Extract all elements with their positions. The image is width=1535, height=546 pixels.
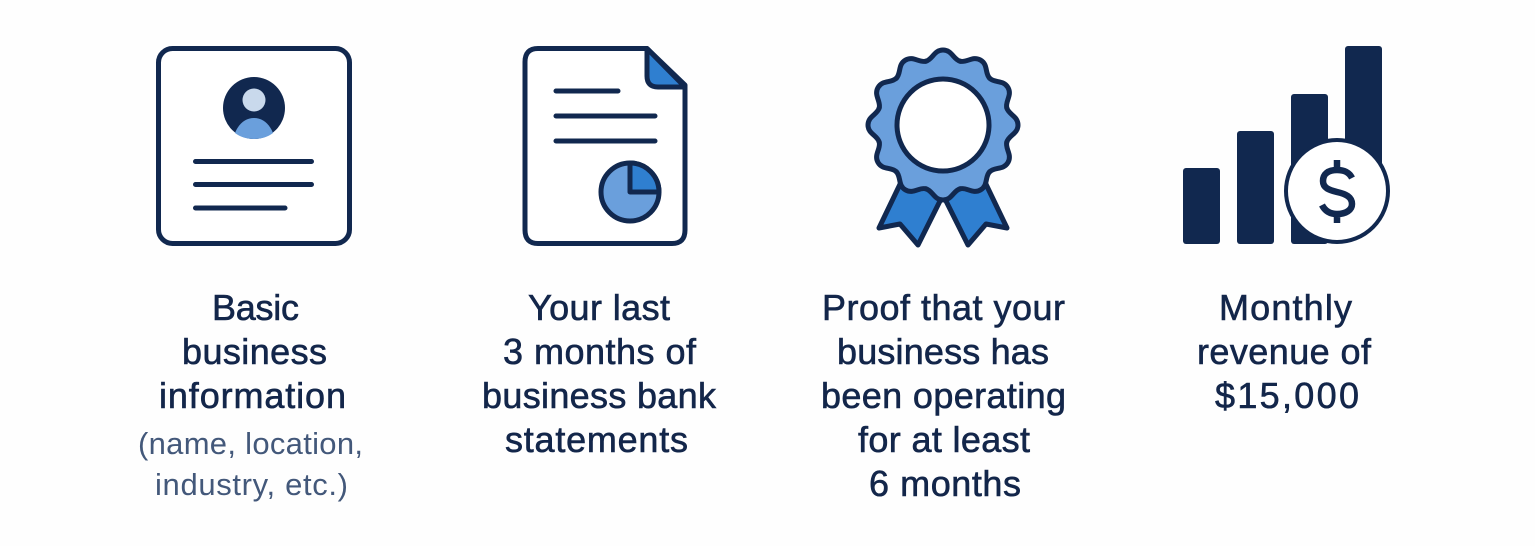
heading: proof of six months operating: 6 months (869, 463, 1021, 504)
icon: bar chart with dollar coin (1183, 46, 1388, 244)
panel: bank statements (482, 48, 717, 460)
heading: proof of six months operating: for at least (858, 419, 1030, 460)
heading: basic business information: business (182, 331, 327, 372)
heading: monthly revenue of $15,000 (1197, 287, 1372, 416)
heading: monthly revenue of $15,000: revenue of (1197, 331, 1372, 372)
heading: basic business information: Basic (212, 287, 299, 328)
heading: proof of six months operating: been operating (821, 375, 1066, 416)
heading: last 3 months of statements: Your last (528, 287, 670, 328)
icon: award ribbon (868, 50, 1018, 245)
heading: basic business information (159, 287, 346, 416)
heading: proof of six months operating: Proof that your (822, 287, 1065, 328)
heading: proof of six months operating (821, 287, 1066, 504)
panel: basic business information (138, 48, 363, 502)
heading: monthly revenue of $15,000: $15,000 (1215, 375, 1359, 416)
panel: proof of operation (821, 50, 1066, 504)
heading: last 3 months of statements: business bank (482, 375, 717, 416)
heading: last 3 months of statements (482, 287, 717, 460)
heading: monthly revenue of $15,000: Monthly (1219, 287, 1352, 328)
heading: last 3 months of statements: 3 months of (503, 331, 697, 372)
text: details note (138, 426, 363, 502)
text: details note: (name, location, (138, 426, 363, 461)
heading: basic business information: information (159, 375, 346, 416)
icon: profile document (158, 48, 350, 244)
heading: last 3 months of statements: statements (505, 419, 688, 460)
panel: monthly revenue (1183, 46, 1388, 416)
text: details note: industry, etc.) (155, 467, 348, 502)
icon: statement document with pie chart (525, 48, 685, 244)
heading: proof of six months operating: business has (837, 331, 1049, 372)
